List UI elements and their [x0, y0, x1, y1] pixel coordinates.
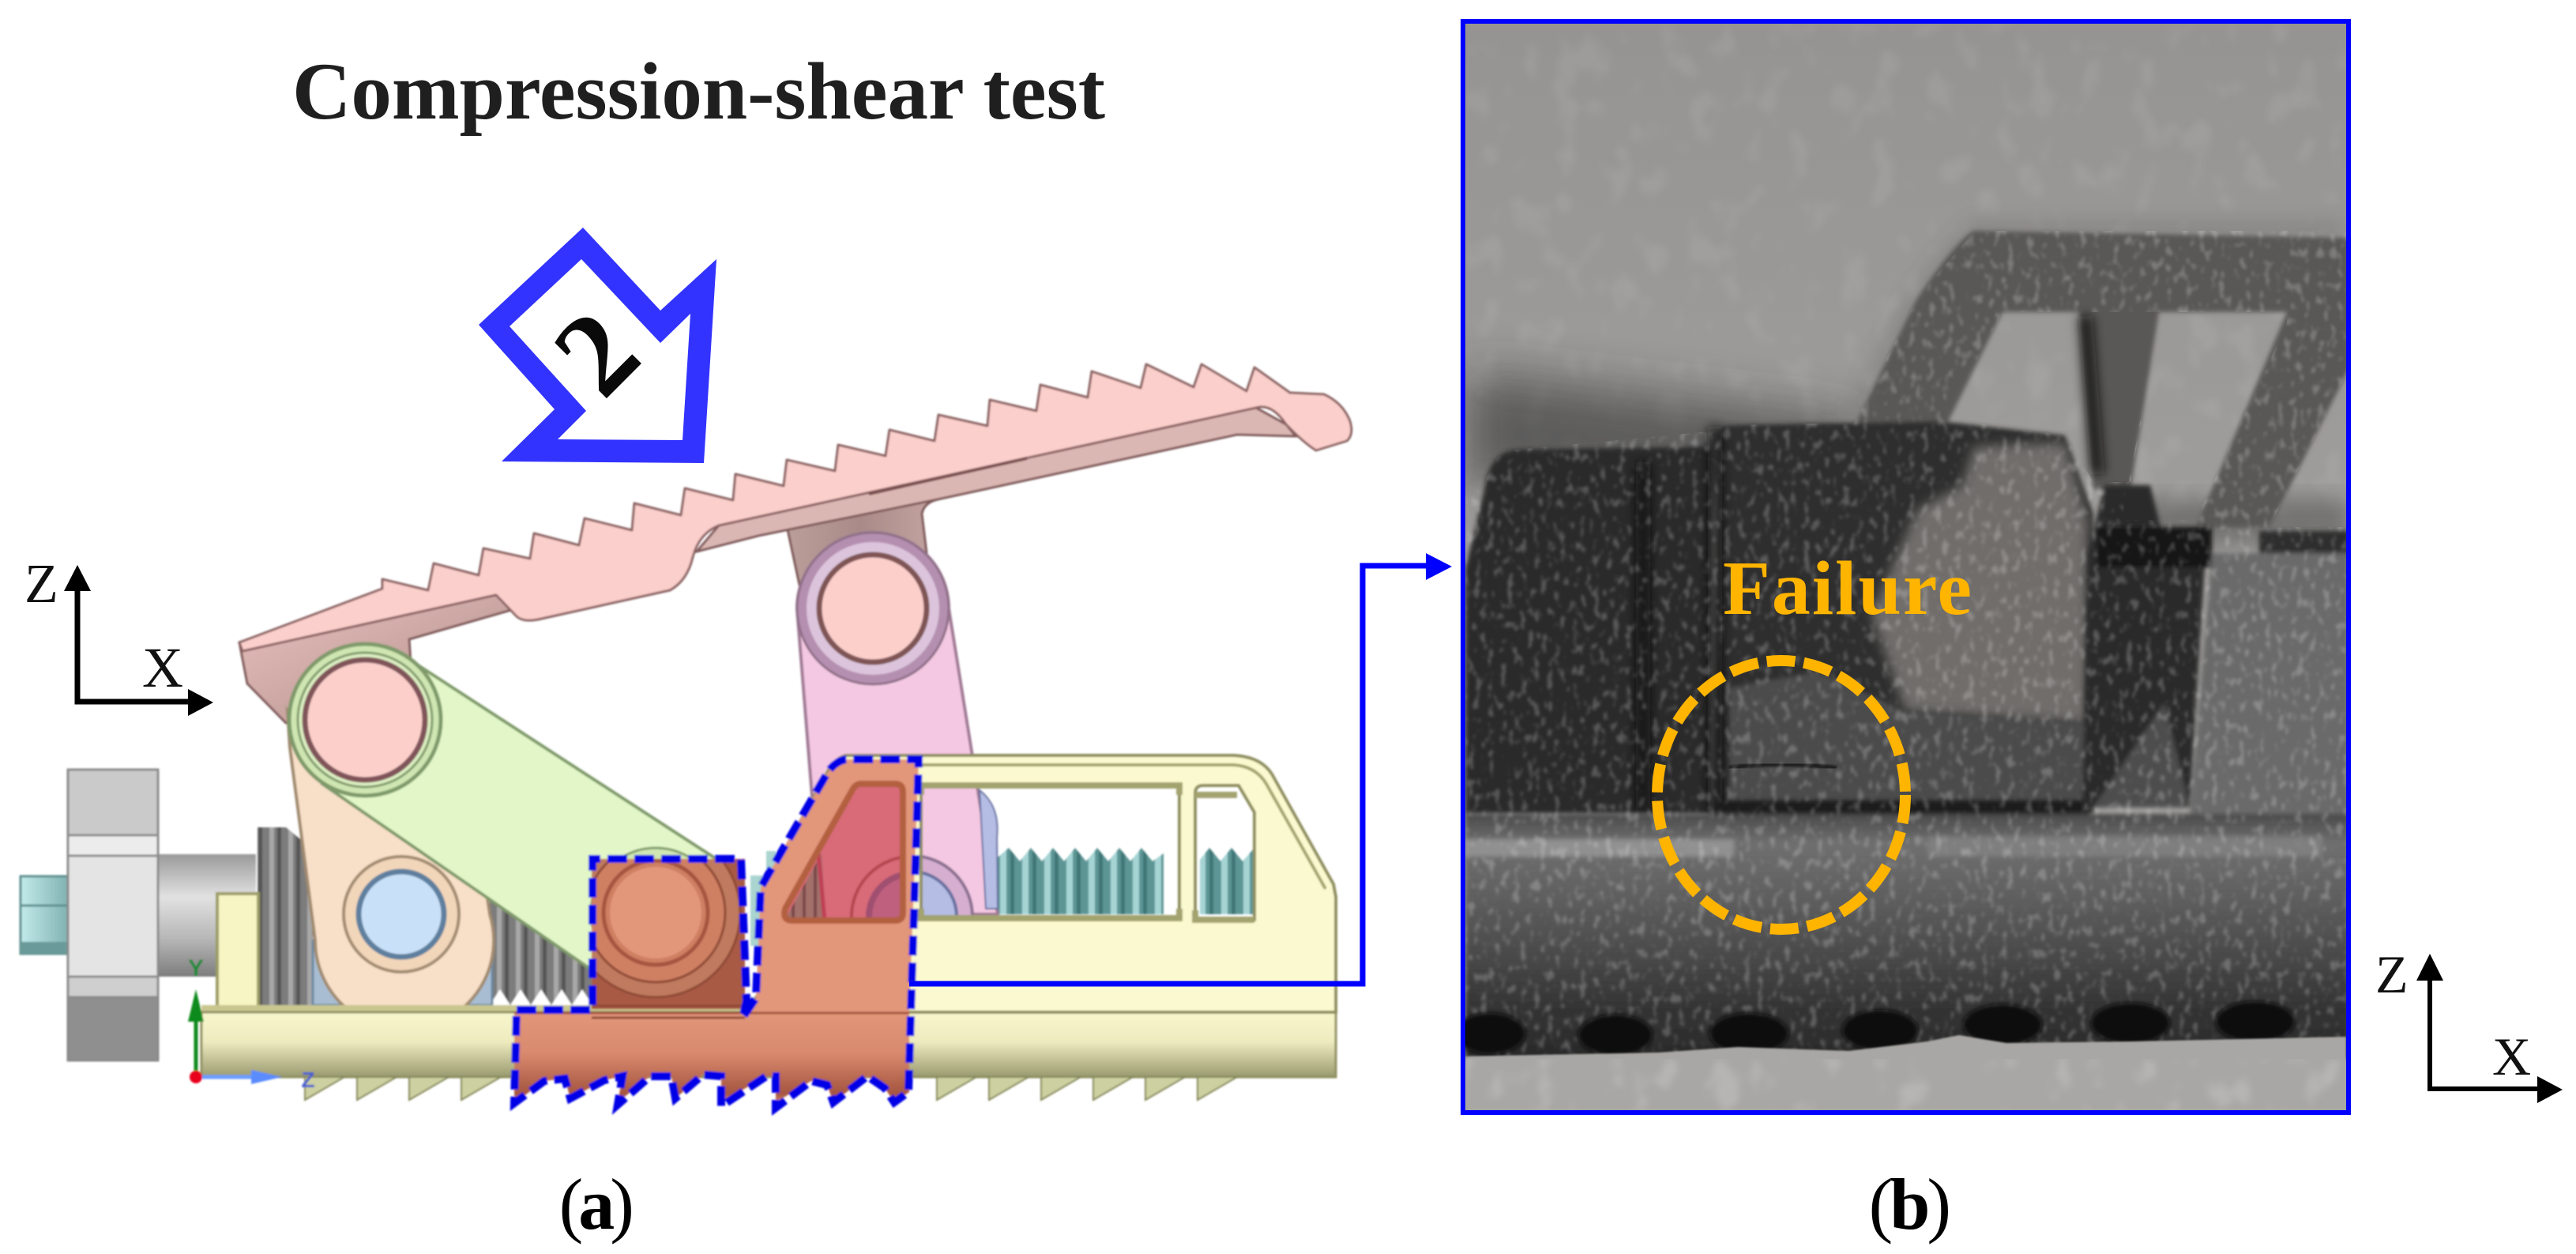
crack: [1729, 764, 1837, 768]
light patch: [1871, 442, 2088, 723]
title: Compression-shear test: [292, 47, 1105, 137]
background streaks: [1465, 24, 2346, 814]
nut: [68, 770, 158, 1060]
axes: Z and X, left: X: [142, 636, 183, 699]
triangular window: [780, 780, 907, 924]
caption (b): (b): [1869, 1164, 1948, 1245]
yellow cage with windows: [744, 755, 1336, 1012]
photo background: [1465, 24, 2346, 1110]
failed region highlighted: [512, 759, 919, 1101]
base teeth: [305, 1077, 1237, 1100]
dashed failure circle: [1657, 661, 1905, 929]
pin and rings in box: [591, 858, 742, 999]
panel: photograph of failed specimen: [1454, 21, 2349, 1113]
caption (a): (a): [559, 1164, 631, 1245]
teal thread in windows: [750, 848, 1254, 946]
bench strip: [1465, 1035, 2346, 1110]
left dark block: [1465, 446, 1712, 814]
axes: Z and X, right: X: [2492, 1026, 2531, 1086]
connector arrow to photo: [909, 553, 1452, 984]
diagram: CAD model of implant: [21, 364, 1352, 1108]
axes: Z and X, right: Z: [2375, 944, 2409, 1004]
middle block: [1714, 421, 2093, 814]
CAD coordinate triad: Y: [188, 955, 204, 981]
beige link: [288, 711, 494, 1030]
label: 2: 2: [528, 285, 664, 420]
pink handle with teeth: [239, 364, 1352, 723]
label: Failure: Failure: [1723, 546, 1973, 631]
speckle on object: [1465, 229, 2346, 1059]
pink lever arm: [782, 490, 998, 977]
base rail: [1465, 814, 2349, 1059]
axes: Z and X, left: [24, 554, 213, 716]
bolt head: [21, 876, 70, 954]
CAD coordinate triad: Z: [301, 1068, 315, 1092]
base bar: [201, 1005, 1336, 1077]
axes: Z and X, right: [2375, 944, 2563, 1103]
gray thread: [258, 827, 594, 1005]
shadow behind object: [1465, 371, 1856, 490]
failed lower part: [1729, 672, 2088, 804]
axes: Z and X, left: Z: [24, 554, 58, 615]
shaft: [158, 854, 256, 977]
green link: [289, 644, 720, 1019]
post: [217, 894, 258, 1011]
arrow: load direction 2: [479, 228, 716, 463]
dashed outline of failed region: [514, 759, 919, 1108]
rail holes: [1454, 1001, 2295, 1056]
dark seams: [1643, 316, 2097, 814]
blue block: [313, 940, 492, 1005]
CAD coordinate triad: [188, 955, 315, 1092]
right section: [2190, 553, 2349, 818]
upper frame struts: [1854, 231, 2349, 527]
dark right block: [2082, 485, 2207, 808]
